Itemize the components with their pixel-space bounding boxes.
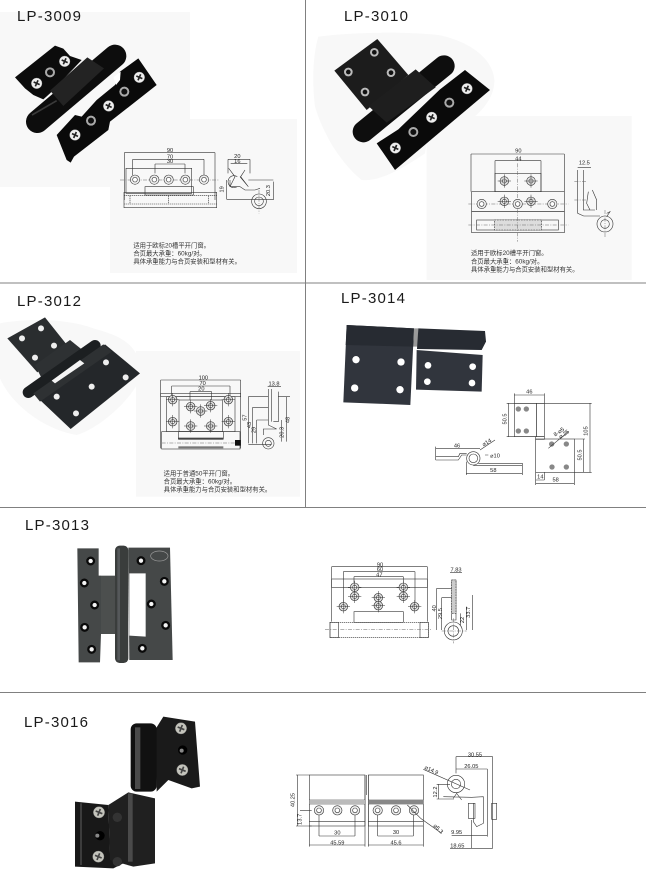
title: LP-3013 [25,517,90,534]
hinge photo [15,46,157,163]
technical drawing: 47 [376,573,382,579]
technical drawing: ⌀14 [481,438,493,448]
technical drawing: 57 [242,415,248,421]
technical drawing: 18.65 [450,844,464,850]
technical drawing: 13.8 [268,382,280,388]
panel: LP-3014 [341,290,592,485]
technical drawing [325,562,472,643]
technical drawing: 19 [220,186,226,192]
panel: LP-3010 [313,8,632,280]
technical drawing: 45.6 [390,840,402,846]
technical drawing: 60 [377,567,383,573]
specification text: 具体承重能力与合页安装和型材有关。 [133,257,241,266]
hinge photo [7,317,140,429]
technical drawing: 20 [198,387,204,393]
title: LP-3009 [17,8,82,25]
technical drawing: 44 [515,156,521,162]
technical drawing: ⌀.25 [558,429,571,441]
technical drawing: 48 [286,417,292,423]
panel: LP-3016 [24,714,497,868]
technical drawing: 100 [199,375,208,381]
specification text [164,469,271,493]
technical drawing [161,375,292,449]
technical drawing: 30 [393,830,399,836]
technical drawing: 70 [200,381,206,387]
technical drawing: 26.05 [464,764,478,770]
technical drawing: 30 [334,831,340,837]
technical drawing: 20.3 [280,427,286,438]
technical drawing: 58 [553,478,559,484]
specification text: 适用于欧标20槽平开门窗。 [133,240,210,249]
technical drawing: 13.7 [297,814,303,825]
specification text: 适用于欧标20槽平开门窗。 [471,248,548,257]
technical drawing: ⌀10 [490,454,500,460]
technical drawing: 90 [377,562,383,568]
technical drawing: 20.3 [266,185,272,196]
title: LP-3012 [17,293,82,310]
technical drawing: ⌀5.3 [432,823,444,835]
technical drawing: 58 [490,468,496,474]
photo background [313,33,632,280]
technical drawing: ⌀14.9 [423,765,439,777]
technical drawing: 90 [515,148,521,154]
technical drawing: 43 [247,422,253,428]
specification text: 适用于普通50平开门窗。 [164,469,234,478]
technical drawing [436,390,592,485]
technical drawing: 22 [460,617,466,623]
technical drawing: 46 [526,390,532,396]
hinge photo [343,325,486,405]
panel: LP-3013 [25,517,472,663]
technical drawing: 9.95 [451,830,462,836]
technical drawing: 40 [432,605,438,611]
technical drawing: 30 [167,159,173,165]
technical drawing: 45.59 [330,840,344,846]
specification text [471,248,579,273]
technical drawing [120,148,273,213]
hinge photo [334,39,490,170]
technical drawing [291,752,497,850]
title: LP-3010 [344,8,409,25]
technical drawing: 50.5 [578,449,584,461]
technical drawing: 12.2 [433,786,439,798]
specification text: 合页最大承重：60kg/对。 [471,256,543,265]
technical drawing [468,148,613,242]
technical drawing: 70 [167,154,173,160]
technical drawing: 20 [234,154,240,160]
panel: LP-3009 [0,8,297,273]
technical drawing: 29.5 [438,608,444,619]
specification text: 具体承重能力与合页安装和型材有关。 [164,484,271,493]
technical drawing: 30.55 [468,752,482,758]
technical drawing: 50.5 [502,413,508,425]
title: LP-3016 [24,714,89,731]
technical drawing: 29 [251,427,257,433]
specification text: 具体承重能力与合页安装和型材有关。 [471,264,579,273]
technical drawing: 12.5 [579,160,590,166]
technical drawing: 90 [167,148,173,154]
photo background [0,12,297,273]
panel: LP-3012 [0,293,300,497]
technical drawing: 7.83 [450,567,462,573]
photo background [0,320,300,497]
hinge photo [75,717,200,868]
technical drawing: 14 [537,474,543,480]
specification text [133,240,241,266]
technical drawing: 33.7 [466,607,472,618]
technical drawing: 105 [584,426,590,436]
technical drawing: 8-⌀5 [553,427,566,438]
technical drawing: 16 [234,159,240,165]
title: LP-3014 [341,290,406,307]
specification text: 合页最大承重：60kg/对。 [164,476,236,485]
panel divider lines [0,0,646,693]
hinge photo [77,546,173,663]
technical drawing: 46 [454,443,460,449]
technical drawing: 40.25 [291,793,297,807]
specification text: 合页最大承重：60kg/对。 [133,249,206,258]
